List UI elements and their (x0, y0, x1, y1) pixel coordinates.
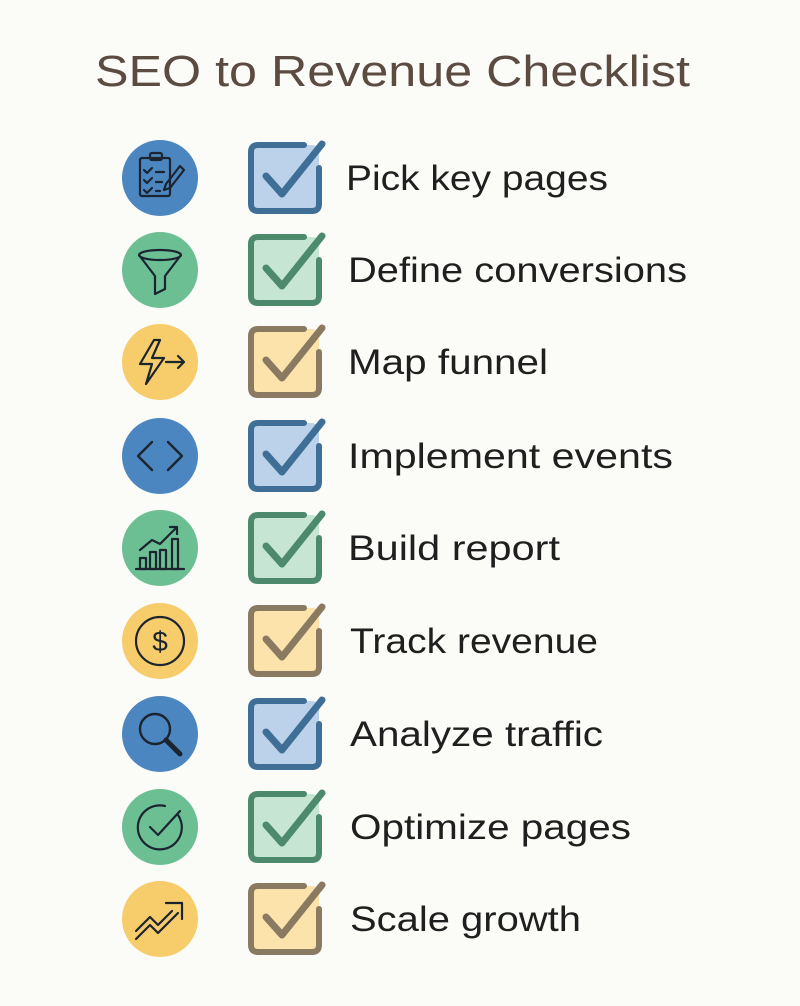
checkbox (251, 422, 322, 489)
label: Define conversions (348, 251, 687, 290)
icon: magnifier (122, 696, 198, 772)
checkbox (251, 328, 322, 395)
row: Define conversions (122, 232, 687, 308)
icon: bolt arrow (122, 324, 198, 400)
row: Scale growth (122, 881, 581, 957)
label: Track revenue (350, 622, 598, 661)
label: Implement events (348, 437, 673, 476)
icon: dollar coin: $ (152, 626, 168, 657)
row: Pick key pages (122, 140, 608, 216)
label: Pick key pages (346, 159, 608, 198)
checkbox (251, 885, 322, 952)
row: Implement events (122, 418, 673, 494)
icon: bar chart (122, 510, 198, 586)
icon: check circle (122, 789, 198, 865)
label: Optimize pages (350, 808, 631, 847)
row: Track revenue (122, 603, 598, 679)
title: SEO to Revenue Checklist (95, 47, 690, 96)
icon: clipboard (122, 140, 198, 216)
checkbox (251, 144, 322, 211)
checkbox (251, 514, 322, 581)
label: Build report (348, 529, 560, 568)
row: Analyze traffic (122, 696, 603, 772)
checkbox (251, 236, 322, 303)
checkbox (251, 607, 322, 674)
icon: code brackets (122, 418, 198, 494)
label: Analyze traffic (350, 715, 603, 754)
checkbox (251, 700, 322, 767)
checkbox (251, 793, 322, 860)
icon: growth arrow (122, 881, 198, 957)
row: Optimize pages (122, 789, 631, 865)
label: Map funnel (348, 343, 548, 382)
row: Map funnel (122, 324, 548, 400)
label: Scale growth (350, 900, 581, 939)
row: Build report (122, 510, 560, 586)
icon: funnel (122, 232, 198, 308)
icon: dollar coin (122, 603, 198, 679)
